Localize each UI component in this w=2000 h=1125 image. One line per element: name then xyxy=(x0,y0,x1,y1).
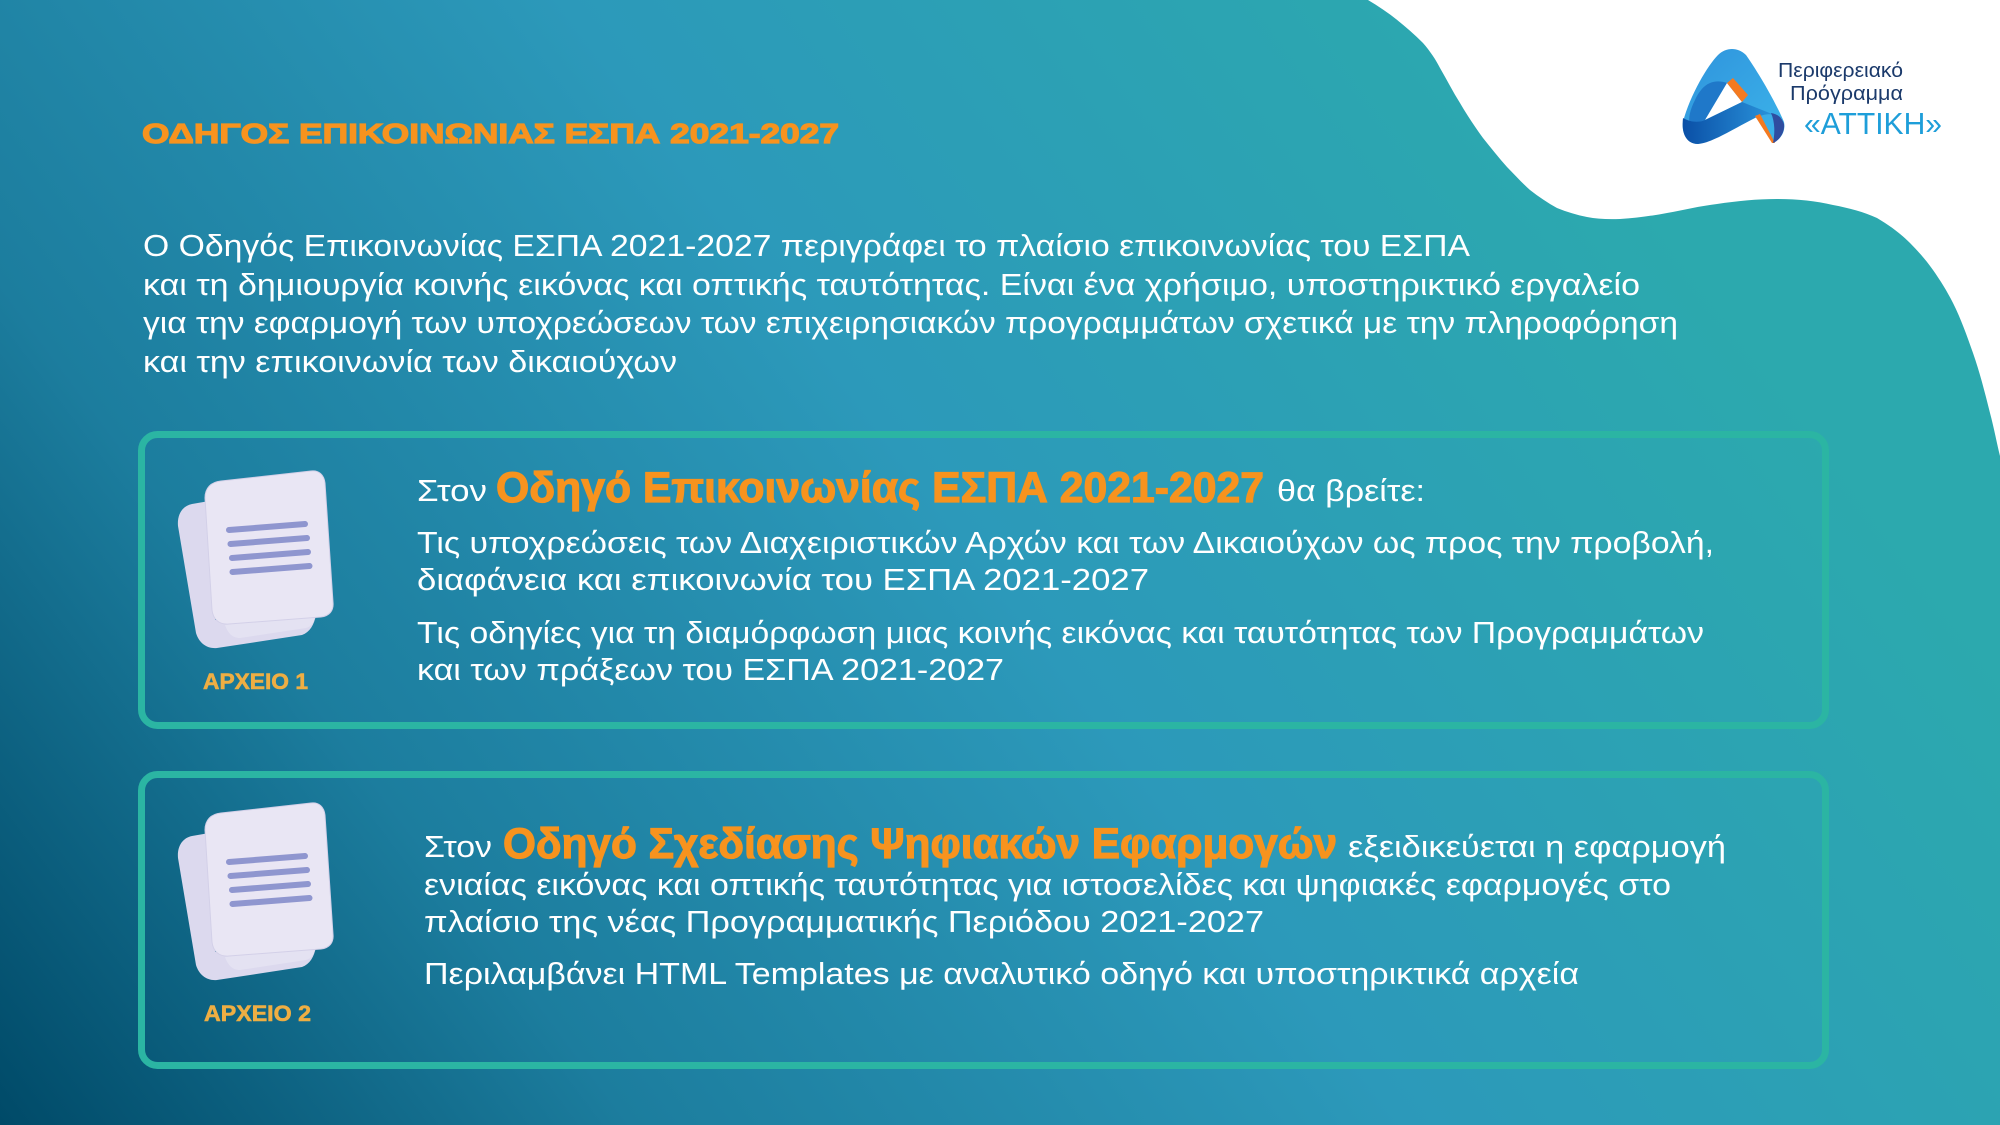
panel 2 border xyxy=(142,774,1826,1066)
intro paragraph: Ο Οδηγός Επικοινωνίας ΕΣΠΑ 2021-2027 περιγράφει το πλαίσιο επικοινωνίας του ΕΣΠΑ xyxy=(143,228,1470,263)
text: file 2 description: ενιαίας εικόνας και οπτικής ταυτότητας για ιστοσελίδες και ψηφιακές εφαρμογές στο xyxy=(424,867,1671,902)
title: ΟΔΗΓΟΣ ΕΠΙΚΟΙΝΩΝΙΑΣ ΕΣΠΑ 2021-2027 xyxy=(142,118,839,149)
icon: documents 2 xyxy=(178,803,333,980)
text: file 1 description: διαφάνεια και επικοινωνία του ΕΣΠΑ 2021-2027 xyxy=(417,562,1149,597)
text: file 1 description xyxy=(417,525,1714,687)
text: file 1 description: Τις υποχρεώσεις των Διαχειριστικών Αρχών και των Δικαιούχων ως προς την προβολή, xyxy=(417,525,1714,560)
heading: file 2 xyxy=(424,820,1726,868)
text: file 2 description: Περιλαμβάνει HTML Templates με αναλυτικό οδηγό και υποστηρικτικά αρχεία xyxy=(424,956,1579,991)
panel: file 1 xyxy=(142,434,1826,726)
logo text xyxy=(1778,60,1942,141)
text: file 2 description: πλαίσιο της νέας Προγραμματικής Περιόδου 2021-2027 xyxy=(424,904,1264,939)
heading: file 1: Οδηγό Επικοινωνίας ΕΣΠΑ 2021-2027 xyxy=(496,464,1264,512)
heading: file 1: Στον xyxy=(417,473,487,508)
heading: file 2: Στον xyxy=(424,829,492,864)
logo text: «ΑΤΤΙΚΗ» xyxy=(1804,106,1942,141)
panel: file 2 xyxy=(142,774,1826,1066)
icon: logo mark xyxy=(1683,49,1784,144)
heading: file 2: εξειδικεύεται η εφαρμογή xyxy=(1348,829,1726,864)
text: file 2 description xyxy=(424,867,1671,991)
label: file 2: ΑΡΧΕΙΟ 2 xyxy=(204,1001,311,1026)
logo text: Περιφερειακό xyxy=(1778,60,1903,82)
intro paragraph: για την εφαρμογή των υποχρεώσεων των επιχειρησιακών προγραμμάτων σχετικά με την πληροφόρηση xyxy=(143,305,1678,340)
intro paragraph xyxy=(143,228,1678,379)
intro paragraph: και την επικοινωνία των δικαιούχων xyxy=(143,344,677,379)
text: file 1 description: Τις οδηγίες για τη διαμόρφωση μιας κοινής εικόνας και ταυτότητας των Προγραμμάτων xyxy=(417,615,1704,650)
logo text: Πρόγραμμα xyxy=(1790,83,1903,105)
panel 1 border xyxy=(142,434,1826,726)
label: file 1: ΑΡΧΕΙΟ 1 xyxy=(203,669,308,694)
intro paragraph: και τη δημιουργία κοινής εικόνας και οπτικής ταυτότητας. Είναι ένα χρήσιμο, υποστηρικτικό εργαλείο xyxy=(143,267,1640,302)
heading: file 2: Οδηγό Σχεδίασης Ψηφιακών Εφαρμογών xyxy=(503,820,1337,868)
heading: file 1: θα βρείτε: xyxy=(1277,473,1425,508)
logo xyxy=(1683,49,1942,144)
icon: documents 1 xyxy=(178,471,333,648)
text: file 1 description: και των πράξεων του ΕΣΠΑ 2021-2027 xyxy=(417,652,1004,687)
